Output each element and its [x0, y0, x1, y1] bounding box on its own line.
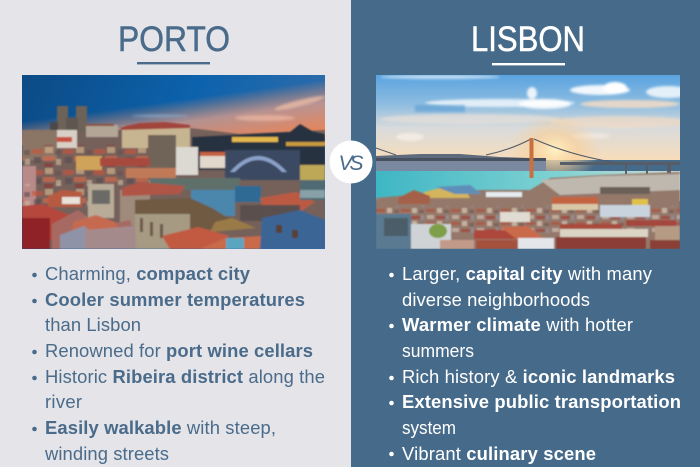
bullet: Ribeira district: Historic Ribeira district along the — [45, 366, 325, 387]
bullet: Ribeira district: river — [45, 391, 82, 412]
bullet: warmer climate: summers — [402, 340, 474, 361]
bullet: public transportation — [389, 391, 681, 438]
bullet: culinary scene: Vibrant culinary scene — [402, 443, 596, 464]
bullet: cooler summers — [32, 289, 305, 335]
bullet: Ribeira district — [32, 366, 325, 412]
VS badge: VS — [338, 152, 364, 175]
photo: Porto cityscape at dusk — [22, 75, 326, 249]
bullet: public transportation: Extensive public transportation — [402, 391, 681, 412]
list: Porto features — [32, 263, 325, 464]
bullet: walkable: winding streets — [44, 443, 169, 464]
bullet: compact city: Charming, compact city — [45, 263, 251, 284]
bridge — [376, 139, 612, 162]
VS badge — [330, 140, 372, 184]
bullet: walkable: Easily walkable with steep, — [45, 417, 276, 438]
bullet: capital city: diverse neighborhoods — [402, 289, 590, 310]
heading underline: Porto — [137, 62, 210, 64]
bullet: port wine cellars: Renowned for port wine cellars — [45, 340, 313, 361]
bullet: public transportation: system — [402, 417, 456, 438]
panel: Porto background — [0, 0, 351, 467]
bullet: cooler summers: Cooler summer temperatures — [45, 289, 305, 310]
bullet: iconic landmarks: Rich history & iconic landmarks — [402, 366, 675, 387]
bullet: warmer climate: Warmer climate with hotter — [402, 314, 633, 335]
heading: Lisbon: LISBON — [471, 20, 585, 59]
panel: Lisbon background — [351, 0, 700, 467]
bullet: walkable — [32, 417, 276, 464]
clouds — [380, 75, 690, 141]
bullet: cooler summers: than Lisbon — [45, 314, 141, 335]
bullet: capital city — [389, 263, 653, 310]
list: Lisbon features — [389, 263, 681, 464]
bullet: warmer climate — [389, 314, 633, 361]
photo: Lisbon bridge and skyline — [376, 75, 690, 249]
bullet: capital city: Larger, capital city with many — [402, 263, 653, 284]
heading: Porto: PORTO — [118, 20, 230, 59]
heading underline: Lisbon — [492, 63, 565, 65]
